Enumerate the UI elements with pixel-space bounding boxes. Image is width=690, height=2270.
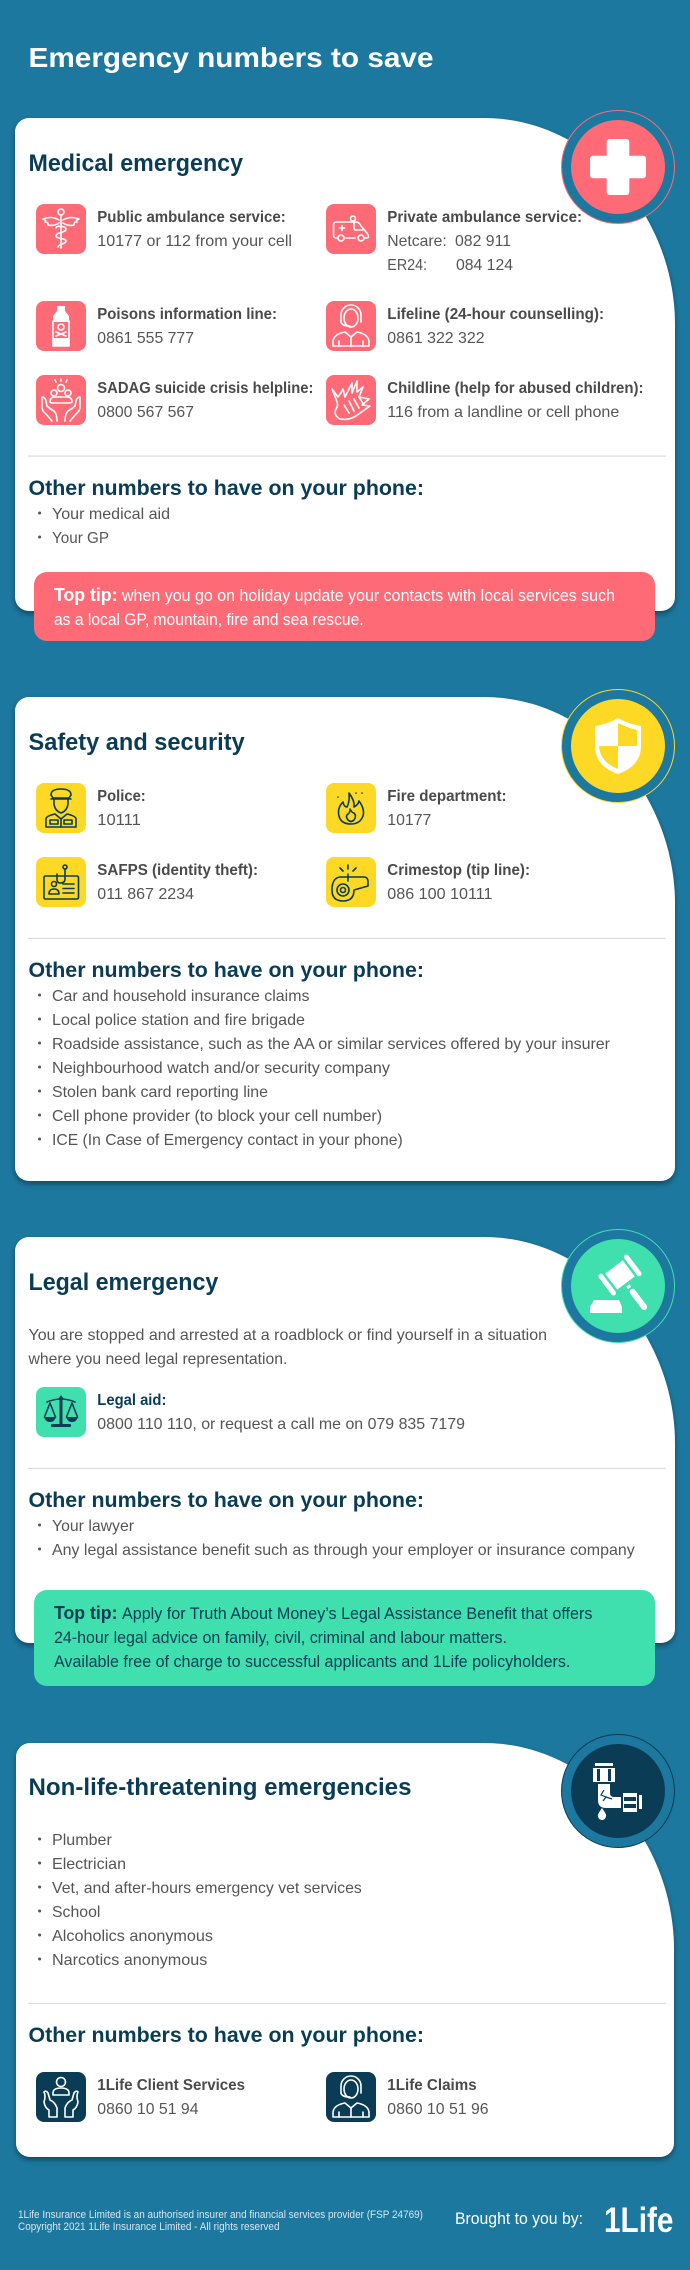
list: other safety numbers: Neighbourhood watch and/or security company	[52, 1060, 390, 1077]
list: other safety numbers: Roadside assistance, such as the AA or similar services offered by your insurer	[52, 1036, 611, 1053]
callout: medical top tip: as a local GP, mountain, fire and sea rescue.	[54, 610, 364, 629]
item: client services	[36, 2072, 245, 2122]
item: legal aid	[36, 1387, 465, 1437]
item: private ambulance: Netcare:	[387, 233, 447, 250]
list: services: Electrician	[52, 1856, 126, 1873]
item: fire department	[326, 783, 507, 833]
item: childline: 116 from a landline or cell phone	[387, 404, 619, 421]
subheading: other numbers: Other numbers to have on your phone:	[28, 2024, 424, 2047]
item: childline: Childline (help for abused children):	[387, 380, 644, 397]
list: services	[38, 1832, 362, 1969]
panel: legal emergency	[15, 1230, 675, 1686]
callout: legal top tip: 24-hour legal advice on family, civil, criminal and labour matters.	[54, 1628, 507, 1647]
subheading: other numbers: Other numbers to have on your phone:	[28, 477, 424, 500]
callout: medical top tip: when you go on holiday update your contacts with local services such	[121, 586, 615, 605]
item: lifeline: Lifeline (24-hour counselling):	[387, 306, 604, 323]
list: services: School	[52, 1904, 100, 1921]
heading: medical emergency: Medical emergency	[28, 150, 244, 177]
list: other legal numbers	[38, 1518, 635, 1559]
callout: legal top tip: Apply for Truth About Money’s Legal Assistance Benefit that offers	[122, 1604, 592, 1623]
list: other safety numbers: ICE (In Case of Emergency contact in your phone)	[52, 1132, 403, 1149]
badge: gavel	[562, 1230, 674, 1342]
heading: legal emergency: Legal emergency	[28, 1269, 219, 1296]
list: other safety numbers: Stolen bank card reporting line	[52, 1084, 268, 1101]
item: childline	[326, 375, 644, 425]
item: safps	[36, 857, 258, 907]
subheading: other numbers: Other numbers to have on your phone:	[28, 1489, 424, 1512]
item: police: Police:	[97, 788, 146, 805]
footer: legal disclaimer	[18, 2209, 423, 2233]
list: services: Plumber	[52, 1832, 112, 1849]
text: legal scenario: where you need legal representation.	[28, 1351, 287, 1368]
item: public ambulance: Public ambulance service:	[97, 209, 286, 226]
item: safps: SAFPS (identity theft):	[97, 862, 258, 879]
badge: leaking pipe	[562, 1734, 674, 1848]
list: other medical numbers	[38, 506, 170, 547]
badge: medical cross	[562, 110, 674, 224]
item: sadag	[36, 375, 313, 425]
list: services: Narcotics anonymous	[52, 1952, 207, 1969]
list: other safety numbers: Car and household insurance claims	[52, 988, 309, 1005]
list: other safety numbers: Local police station and fire brigade	[52, 1012, 305, 1029]
item: poisons line	[36, 301, 277, 351]
item: lifeline: 0861 322 322	[387, 330, 485, 347]
list: other medical numbers: Your medical aid	[52, 506, 170, 523]
footer: brought to you by: Brought to you by:	[455, 2209, 583, 2228]
callout: medical top tip	[34, 572, 655, 641]
item: crimestop	[326, 857, 530, 907]
callout: legal top tip: Top tip:	[54, 1603, 118, 1623]
callout: legal top tip	[34, 1590, 655, 1686]
item: legal aid: Legal aid:	[97, 1392, 166, 1409]
item: public ambulance	[36, 204, 292, 254]
list: services: Vet, and after-hours emergency vet services	[52, 1880, 362, 1897]
item: sadag: SADAG suicide crisis helpline:	[97, 380, 313, 397]
list: other safety numbers	[38, 988, 611, 1149]
item: safps: 011 867 2234	[97, 886, 194, 903]
item: client services: 1Life Client Services	[97, 2077, 245, 2094]
item: claims: 0860 10 51 96	[387, 2101, 489, 2118]
item: fire department: Fire department:	[387, 788, 507, 805]
item: crimestop: Crimestop (tip line):	[387, 862, 530, 879]
item: crimestop: 086 100 10111	[387, 886, 493, 903]
callout: medical top tip: Top tip:	[54, 585, 118, 605]
badge: shield	[562, 690, 674, 802]
item: private ambulance: 084 124	[456, 257, 513, 274]
heading: safety and security: Safety and security	[28, 729, 245, 756]
subheading: other numbers: Other numbers to have on your phone:	[28, 959, 424, 982]
panel: safety and security	[15, 690, 675, 1181]
item: private ambulance: Private ambulance service:	[387, 209, 582, 226]
footer: legal disclaimer: Copyright 2021 1Life Insurance Limited - All rights reserved	[18, 2221, 280, 2233]
text: legal scenario	[28, 1327, 547, 1368]
panel: medical emergency	[15, 110, 675, 641]
list: other medical numbers: Your GP	[52, 530, 109, 547]
item: lifeline	[326, 301, 604, 351]
item: claims	[326, 2072, 489, 2122]
item: private ambulance: 082 911	[455, 233, 511, 250]
item: claims: 1Life Claims	[387, 2077, 477, 2094]
text: legal scenario: You are stopped and arrested at a roadblock or find yourself in a situation	[28, 1327, 547, 1344]
footer: legal disclaimer: 1Life Insurance Limited is an authorised insurer and financial services provider (FSP 24769)	[18, 2209, 423, 2221]
item: police	[36, 783, 146, 833]
item: client services: 0860 10 51 94	[97, 2101, 199, 2118]
logo: 1Life: 1Life	[604, 2201, 673, 2240]
item: public ambulance: 10177 or 112 from your cell	[97, 233, 292, 250]
item: fire department: 10177	[387, 812, 431, 829]
item: private ambulance: ER24:	[387, 257, 427, 274]
item: police: 10111	[97, 812, 141, 829]
title: Emergency numbers to save	[28, 42, 434, 73]
heading: non-life-threatening: Non-life-threatening emergencies	[28, 1774, 412, 1801]
item: legal aid: 0800 110 110, or request a call me on 079 835 7179	[97, 1416, 465, 1433]
item: sadag: 0800 567 567	[97, 404, 194, 421]
item: private ambulance	[326, 204, 582, 274]
list: other legal numbers: Your lawyer	[52, 1518, 135, 1535]
list: services: Alcoholics anonymous	[52, 1928, 213, 1945]
callout: legal top tip: Available free of charge to successful applicants and 1Life policyholders.	[54, 1652, 570, 1671]
list: other safety numbers: Cell phone provider (to block your cell number)	[52, 1108, 382, 1125]
list: other legal numbers: Any legal assistance benefit such as through your employer or insurance company	[52, 1542, 635, 1559]
panel: non-life-threatening emergencies	[16, 1734, 674, 2157]
item: poisons line: Poisons information line:	[97, 306, 277, 323]
item: poisons line: 0861 555 777	[97, 330, 194, 347]
